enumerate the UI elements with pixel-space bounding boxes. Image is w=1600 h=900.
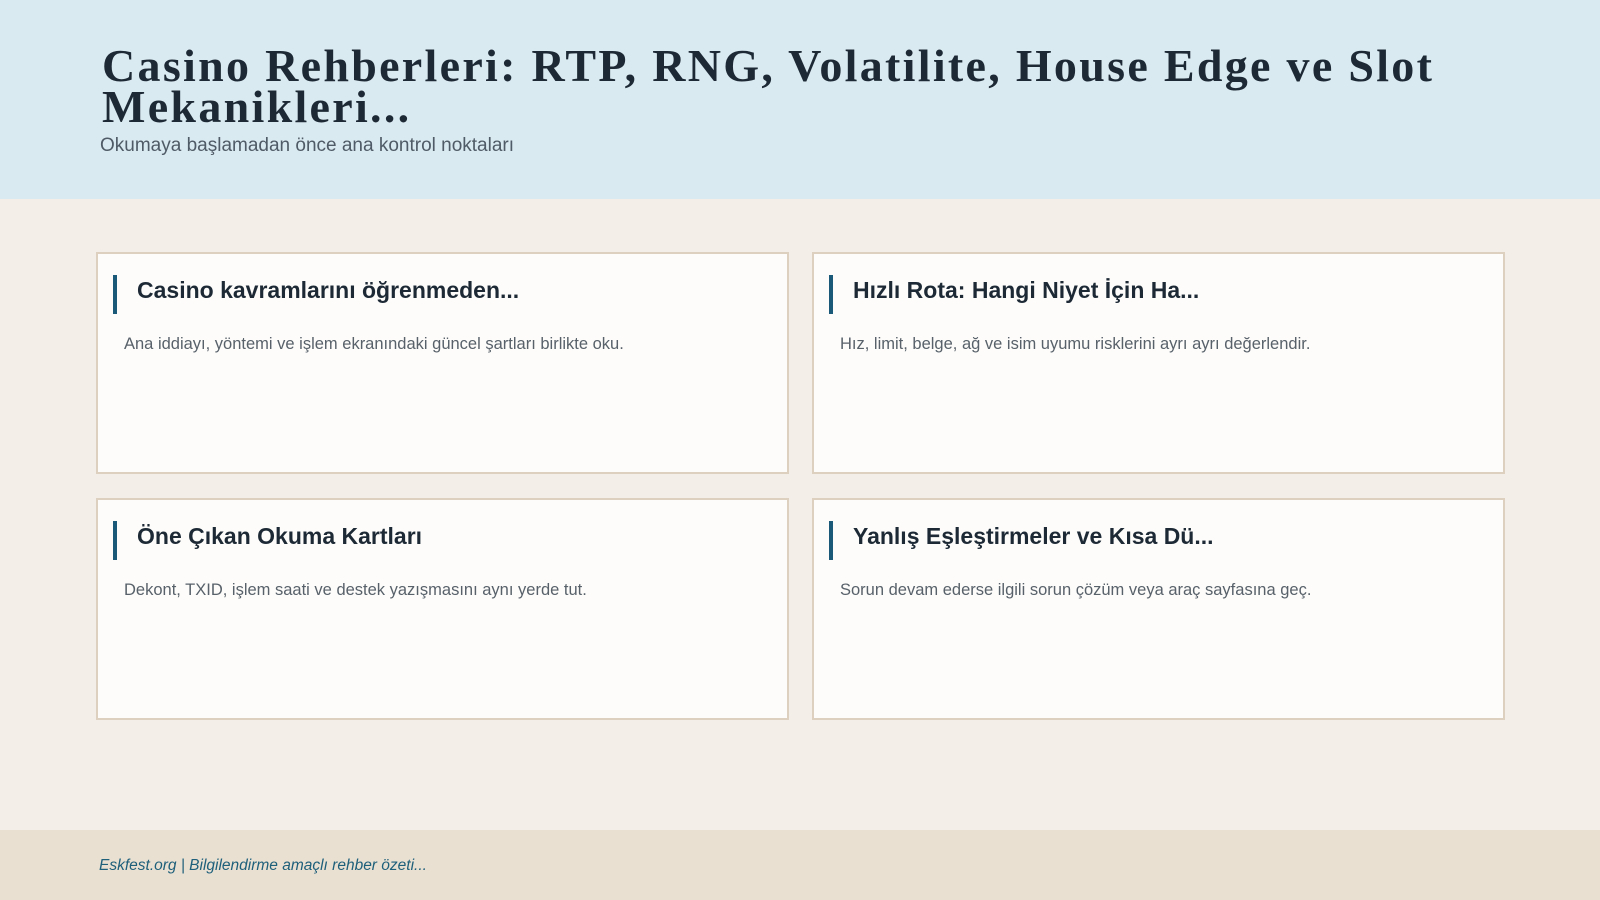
accent bar xyxy=(829,275,833,314)
panel text: Ana iddiayı, yöntemi ve işlem ekranındaki güncel şartları birlikte oku. xyxy=(124,335,624,353)
panel heading: Casino kavramlarını öğrenmeden... xyxy=(137,277,519,303)
panel: öne çıkan xyxy=(96,498,789,720)
panel heading: Hızlı Rota: Hangi Niyet İçin Ha... xyxy=(853,277,1199,303)
panel text: Sorun devam ederse ilgili sorun çözüm veya araç sayfasına geç. xyxy=(840,581,1311,599)
accent bar xyxy=(113,275,117,314)
panel: casino kavramları xyxy=(96,252,789,474)
panel: hızlı rota xyxy=(812,252,1505,474)
accent bar xyxy=(113,521,117,560)
panel text: Hız, limit, belge, ağ ve isim uyumu risklerini ayrı ayrı değerlendir. xyxy=(840,335,1310,353)
footer: Eskfest.org | Bilgilendirme amaçlı rehber özeti... xyxy=(99,857,427,874)
header band xyxy=(0,0,1600,199)
footer xyxy=(0,830,1600,900)
subtitle: Okumaya başlamadan önce ana kontrol noktaları xyxy=(100,135,514,156)
panel: yanlış eşleştirmeler xyxy=(812,498,1505,720)
panel heading: Öne Çıkan Okuma Kartları xyxy=(137,523,422,549)
panel heading: Yanlış Eşleştirmeler ve Kısa Dü... xyxy=(853,523,1214,549)
panel text: Dekont, TXID, işlem saati ve destek yazışmasını aynı yerde tut. xyxy=(124,581,587,599)
accent bar xyxy=(829,521,833,560)
title: Casino Rehberleri: RTP, RNG, Volatilite, House Edge ve Slot Mekanikleri... xyxy=(102,40,1434,132)
